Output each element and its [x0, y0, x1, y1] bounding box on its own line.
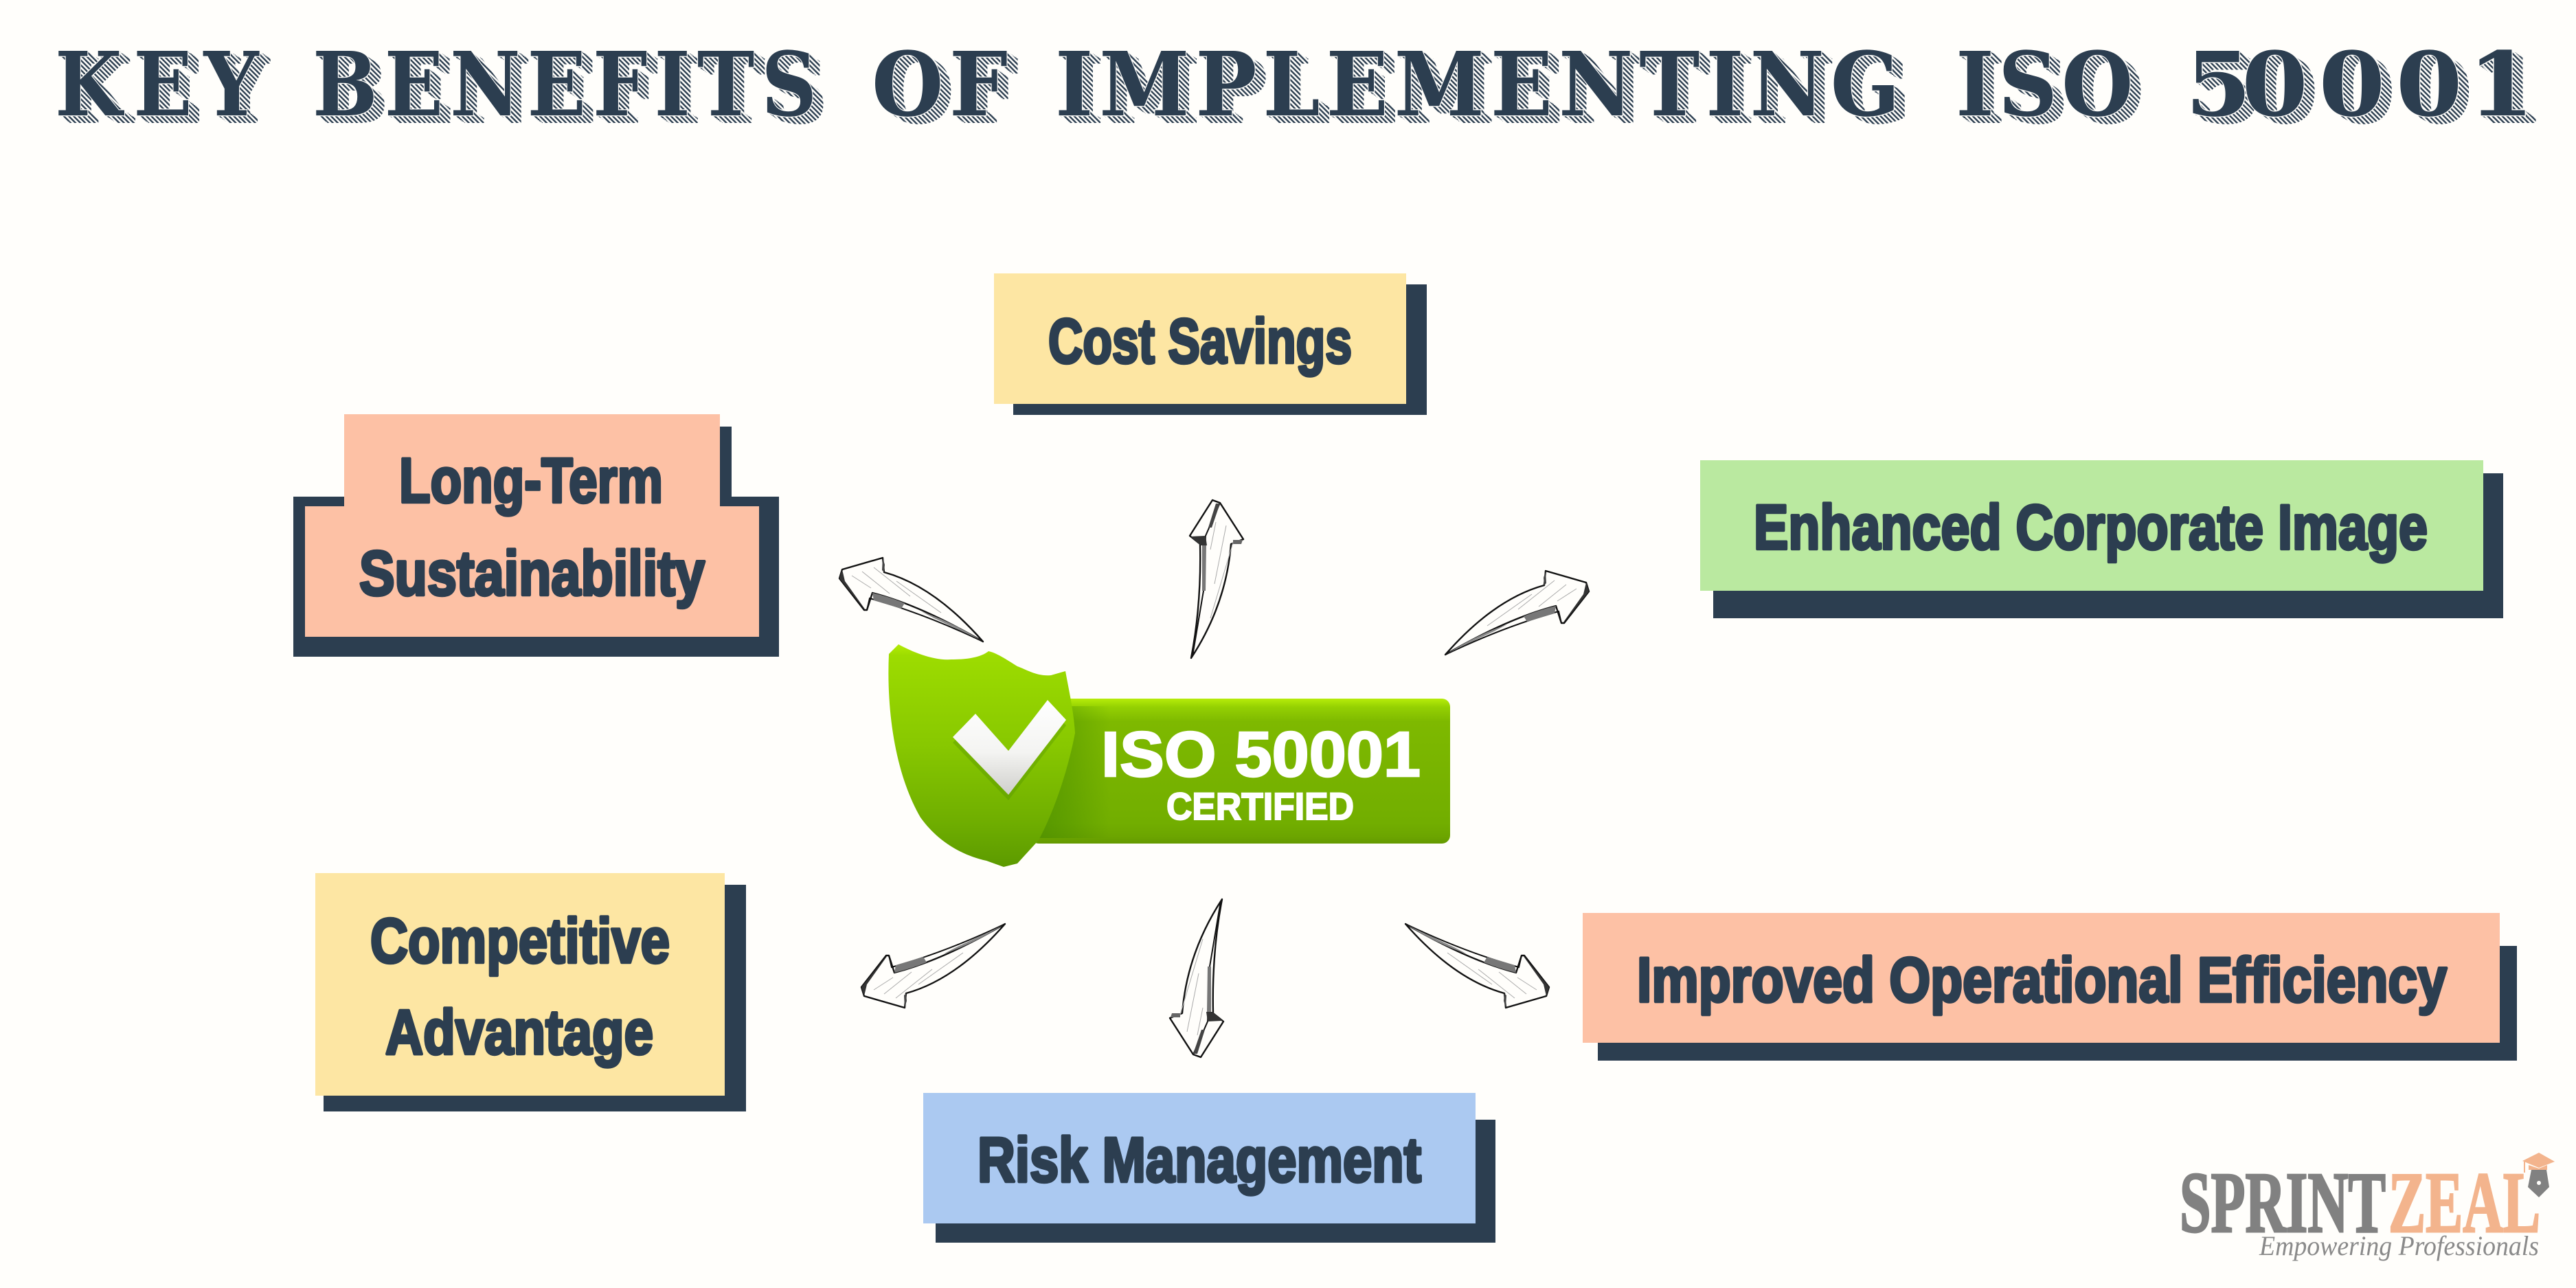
logo: sprintzeal	[2180, 1153, 2555, 1261]
panel: improved operational efficiency	[1583, 913, 2517, 1061]
title text: OF	[872, 33, 1008, 137]
title text: IMPLEMENTING	[1055, 33, 1900, 137]
badge: ISO 50001 certified	[888, 644, 1450, 867]
arrow: to competitive advantage	[861, 924, 1005, 1008]
panel: risk management	[923, 1093, 1495, 1243]
badge text: ISO 50001	[1101, 719, 1421, 790]
title hatched shadow	[60, 52, 2536, 124]
check mark shadow	[953, 705, 1066, 800]
icon: shield	[888, 644, 1075, 867]
title text	[55, 32, 2534, 137]
panel: enhanced corporate image: Enhanced Corporate Image	[1754, 493, 2428, 563]
title text: 50001	[2185, 32, 2534, 137]
panel: competitive advantage: Competitive	[370, 906, 670, 976]
title text: ISO	[1956, 33, 2134, 137]
title	[58, 49, 2536, 124]
panel: cost savings: Cost Savings	[1048, 306, 1352, 376]
arrow: to long-term sustainability	[839, 558, 983, 642]
logo wordmark: SPRINT	[2180, 1155, 2386, 1251]
panel: competitive advantage	[315, 873, 746, 1111]
title text: BENEFITS	[313, 32, 817, 137]
panel: long-term sustainability: Sustainability	[359, 539, 705, 609]
panel: long-term sustainability: Long-Term	[399, 446, 663, 516]
panel: enhanced corporate image	[1700, 460, 2503, 618]
badge: ISO 50001 certified: CERTIFIED	[1166, 784, 1354, 828]
icon: check mark	[953, 700, 1066, 795]
arrow: to cost savings	[1190, 500, 1243, 658]
badge ribbon	[1030, 699, 1450, 844]
panel: competitive advantage: Advantage	[385, 997, 653, 1067]
title text: KEY	[55, 32, 260, 137]
icon: pen nib	[2528, 1170, 2549, 1197]
arrow: to risk management	[1170, 899, 1223, 1057]
panel: cost savings	[994, 273, 1427, 415]
panel: long-term sustainability	[293, 414, 779, 657]
logo tagline: Empowering Professionals	[2259, 1230, 2539, 1261]
panel: risk management: Risk Management	[978, 1125, 1421, 1195]
arrow: to enhanced corporate image	[1445, 571, 1589, 655]
arrow: to improved operational efficiency	[1405, 924, 1549, 1008]
icon: graduation cap	[2522, 1153, 2555, 1173]
